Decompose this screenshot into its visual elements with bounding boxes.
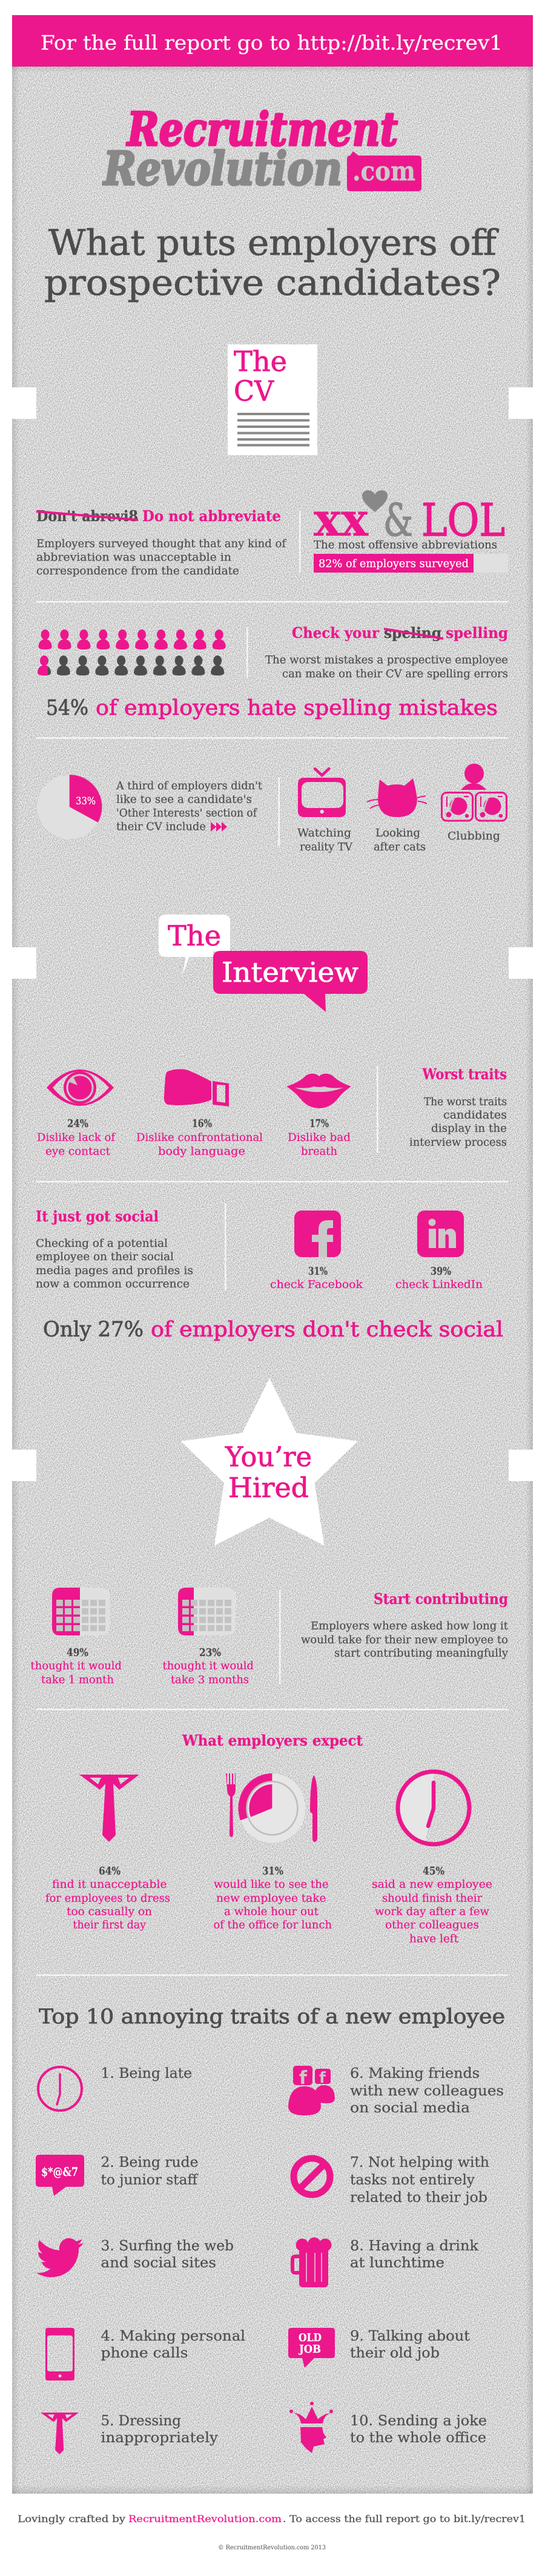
calendar icon 23%	[162, 1588, 254, 1686]
item 8: having a drink	[291, 2237, 479, 2287]
copyright: © RecruitmentRevolution.com 2013	[218, 2545, 326, 2551]
heading: What employers expect	[182, 1732, 363, 1749]
heading: Top 10 annoying traits of a new employee	[39, 2005, 505, 2029]
block: start contributing	[30, 1588, 508, 1686]
logo: Recruitment Revolution .com: Recruitment	[126, 102, 398, 156]
block: other interests	[37, 764, 506, 853]
item 6: social friends: 6. Making friends	[350, 2066, 480, 2082]
block: do not abbreviate: The most offensive abbreviations	[314, 539, 497, 551]
icon: cat: after cats	[374, 841, 426, 853]
worst traits text: candidates	[443, 1109, 507, 1122]
triple arrow	[211, 822, 227, 832]
section heading: The CV document	[228, 344, 317, 455]
section heading: The Interview speech bubbles: Interview	[222, 956, 358, 988]
body text: correspondence from the candidate	[36, 565, 239, 577]
worst traits text: The worst traits	[424, 1096, 507, 1108]
statistic headline: of employers hate spelling mistakes	[96, 696, 498, 720]
icon: tie with 64%: their first day	[73, 1919, 146, 1931]
body text: Employers surveyed thought that any kind of	[36, 538, 287, 550]
heading with struck-through word: Do not abbreviate	[142, 507, 281, 525]
item 10: joke	[289, 2402, 487, 2453]
start contributing text: Start contributing	[374, 1590, 508, 1608]
icon: tie with 64%: find it unacceptable	[52, 1879, 167, 1891]
item 8: having a drink: at lunchtime	[350, 2255, 444, 2271]
statistic headline: 54%	[46, 696, 88, 720]
footer credit line	[18, 2513, 526, 2525]
calendar icon 49%: thought it would	[30, 1660, 122, 1672]
block: what employers expect	[45, 1732, 492, 1945]
icon: cat: Looking	[375, 827, 420, 840]
section heading: You're Hired star: Hired	[228, 1472, 309, 1503]
pie chart 33%	[37, 775, 102, 839]
icon: boxing glove with 16%: Dislike confrontational	[136, 1132, 263, 1144]
item 2: being rude: $*@&7	[41, 2164, 78, 2179]
item 5: dressing: 5. Dressing	[101, 2413, 181, 2429]
icon: TV: Watching	[297, 827, 351, 840]
item 1: being late: 1. Being late	[101, 2066, 192, 2082]
icon: boxing glove with 16%: 16%	[192, 1118, 212, 1130]
item 6: social friends: on social media	[350, 2100, 470, 2116]
block: check your spelling	[38, 624, 508, 720]
icon: clock with 45%: should finish their	[382, 1893, 483, 1905]
calendar icon 49%: take 1 month	[41, 1674, 114, 1686]
main title	[44, 222, 501, 303]
heading with struck-through word: Don't abrevi8	[36, 507, 138, 525]
logo: Recruitment Revolution .com: Revolution	[102, 142, 342, 196]
item 8: having a drink: 8. Having a drink	[350, 2238, 479, 2254]
item 9: old job: 9. Talking about	[350, 2328, 471, 2344]
social text: It just got social	[36, 1208, 159, 1225]
icon: cat	[367, 778, 427, 853]
body text	[36, 538, 287, 577]
item 9: old job: OLD	[299, 2331, 322, 2344]
block: worst traits	[37, 1065, 507, 1158]
icon: eye with 24%: eye contact	[45, 1146, 110, 1158]
item 4: phone calls	[45, 2328, 245, 2380]
item 5: dressing: inappropriately	[101, 2430, 218, 2446]
calendar icon 23%: 23%	[199, 1647, 221, 1659]
item 7: not helping	[294, 2155, 489, 2206]
section heading: The Interview speech bubbles: The	[168, 919, 221, 952]
xx heart and LOL graphic: xx	[314, 493, 369, 547]
icon: plate and cutlery with 31%	[213, 1773, 332, 1931]
start contributing text: would take for their new employee to	[301, 1634, 508, 1646]
section heading: You're Hired star: You’re	[225, 1441, 312, 1473]
block: top 10 annoying traits	[36, 2005, 505, 2454]
icon: LinkedIn with 39%: check LinkedIn	[395, 1279, 483, 1291]
item 6: social friends: f	[299, 2068, 308, 2089]
icon: tie with 64%: 64%	[99, 1865, 121, 1878]
icon: boxing glove with 16%: body language	[158, 1146, 245, 1158]
icon: plate and cutlery with 31%: of the office for lunch	[213, 1919, 332, 1931]
icon: tie with 64%: too casually on	[67, 1906, 152, 1918]
item 5: dressing	[41, 2413, 218, 2454]
block: it just got social	[36, 1203, 503, 1342]
icon: plate and cutlery with 31%: would like to see the	[214, 1879, 328, 1891]
xx heart and LOL graphic: LOL	[421, 494, 505, 547]
icon: eye with 24%: Dislike lack of	[37, 1132, 116, 1144]
icon: TV	[297, 769, 352, 853]
statistic headline: of employers don't check social	[151, 1318, 503, 1342]
calendar icon 49%	[30, 1588, 122, 1686]
top banner	[12, 15, 533, 67]
icon: plate and cutlery with 31%: new employee take	[216, 1893, 326, 1905]
icon: lips with 17%: Dislike bad	[288, 1132, 351, 1144]
body text: abbreviation was unacceptable in	[36, 552, 231, 564]
icon: tie with 64%: for employees to dress	[45, 1893, 170, 1905]
item 1: being late	[38, 2066, 192, 2111]
item 9: old job: JOB	[298, 2343, 321, 2356]
xx heart and LOL graphic: &	[383, 494, 413, 547]
footer credit line: . To access the full report go to bit.ly/recrev1	[283, 2513, 526, 2525]
item 7: not helping: related to their job	[350, 2190, 487, 2206]
body text: The worst mistakes a prospective employee	[265, 654, 508, 666]
item 6: social friends: f	[319, 2069, 326, 2086]
xx heart and LOL graphic	[314, 490, 505, 547]
main title: prospective candidates?	[44, 262, 501, 303]
icon: clock with 45%: said a new employee	[372, 1879, 492, 1891]
logo: Recruitment Revolution .com: .com	[352, 156, 415, 187]
logo: Recruitment Revolution .com	[102, 102, 421, 196]
heading with struck-through word	[292, 624, 508, 642]
footer credit line: Lovingly crafted by	[18, 2513, 125, 2525]
item 2: being rude: to junior staff	[101, 2172, 199, 2188]
item 6: social friends: with new colleagues	[350, 2083, 504, 2099]
82% progress bar	[314, 554, 508, 573]
social text	[36, 1208, 193, 1290]
heading with struck-through word: Check your	[292, 624, 379, 642]
item 4: phone calls: 4. Making personal	[101, 2328, 245, 2344]
text block	[116, 780, 262, 833]
worst traits text	[409, 1065, 507, 1149]
icon: plate and cutlery with 31%: 31%	[262, 1865, 283, 1878]
icon: lips with 17%: 17%	[309, 1118, 329, 1130]
body text: can make on their CV are spelling errors	[282, 668, 508, 680]
section heading: You're Hired star	[180, 1378, 358, 1546]
social text: media pages and profiles is	[36, 1265, 193, 1277]
worst traits text: display in the	[431, 1123, 507, 1135]
heading with struck-through word	[36, 507, 281, 525]
body text	[265, 654, 508, 680]
footer credit line: RecruitmentRevolution.com	[128, 2513, 282, 2525]
item 7: not helping: tasks not entirely	[350, 2172, 475, 2188]
top banner: For the full report go to http://bit.ly/recrev1	[41, 31, 503, 54]
icon: Facebook with 31%: check Facebook	[270, 1279, 363, 1291]
icon: lips with 17%	[286, 1074, 351, 1158]
icon: clock with 45%: 45%	[423, 1865, 444, 1878]
icon: clock with 45%: work day after a few	[375, 1906, 489, 1918]
item 2: being rude: 2. Being rude	[101, 2155, 199, 2170]
icon: TV: reality TV	[300, 841, 352, 853]
item 10: joke: to the whole office	[350, 2430, 486, 2446]
icon: plate and cutlery with 31%: a whole hour out	[224, 1906, 319, 1918]
item 10: joke: 10. Sending a joke	[350, 2413, 487, 2429]
statistic headline: Only 27%	[43, 1318, 144, 1342]
section heading: The Interview speech bubbles	[159, 915, 368, 1012]
item 3: surfing the web: 3. Surfing the web	[101, 2238, 234, 2254]
calendar icon 23%: take 3 months	[171, 1674, 249, 1686]
icon: clock with 45%: other colleagues	[385, 1919, 479, 1931]
icon: Facebook with 31%	[270, 1211, 363, 1291]
icon: eye with 24%	[37, 1070, 116, 1158]
item 4: phone calls: phone calls	[101, 2345, 188, 2361]
start contributing text: Employers where asked how long it	[311, 1620, 508, 1632]
icon: clock with 45%: have left	[409, 1933, 458, 1945]
icon: lips with 17%: breath	[301, 1146, 337, 1158]
item 7: not helping: 7. Not helping with	[350, 2155, 489, 2170]
item 9: old job	[288, 2328, 471, 2368]
icon: DJ with decks: Clubbing	[448, 830, 500, 843]
heading with struck-through word: spelling	[446, 624, 508, 642]
calendar icon 49%: 49%	[67, 1647, 88, 1659]
worst traits text: interview process	[409, 1137, 507, 1149]
icon: Facebook with 31%: 31%	[308, 1266, 328, 1278]
start contributing text: start contributing meaningfully	[334, 1648, 508, 1660]
people pictogram 54%	[38, 629, 226, 675]
icon: DJ with decks	[442, 764, 506, 843]
start contributing text	[301, 1590, 508, 1660]
icon: LinkedIn with 39%: 39%	[431, 1266, 451, 1278]
section heading: The CV document: CV	[234, 375, 274, 407]
item 2: being rude	[36, 2155, 199, 2196]
item 3: surfing the web: and social sites	[101, 2255, 216, 2271]
worst traits text: Worst traits	[422, 1065, 507, 1083]
block: do not abbreviate	[36, 490, 508, 577]
social text: Checking of a potential	[36, 1238, 168, 1250]
text block: their CV include	[116, 821, 206, 833]
text block: 'Other Interests' section of	[116, 807, 257, 820]
icon: eye with 24%: 24%	[67, 1118, 88, 1130]
icon: boxing glove with 16%	[136, 1069, 263, 1158]
82% progress bar: 82% of employers surveyed	[319, 558, 469, 570]
pie chart 33%: 33%	[76, 795, 96, 807]
social text: employee on their social	[36, 1251, 174, 1263]
item 6: social friends	[288, 2066, 504, 2116]
calendar icon 23%: thought it would	[162, 1660, 254, 1672]
item 9: old job: their old job	[350, 2345, 440, 2361]
item 3: surfing the web	[36, 2238, 234, 2277]
icon: LinkedIn with 39%	[395, 1211, 483, 1291]
icon: tie with 64%	[45, 1775, 170, 1931]
icon: clock with 45%	[372, 1770, 492, 1945]
heading with struck-through word: speling	[384, 624, 441, 642]
social text: now a common occurrence	[36, 1278, 190, 1290]
text block: A third of employers didn't	[116, 780, 262, 792]
text block: like to see a candidate's	[116, 794, 252, 806]
main title: What puts employers off	[48, 222, 499, 263]
section heading: The CV document: The	[234, 345, 287, 378]
